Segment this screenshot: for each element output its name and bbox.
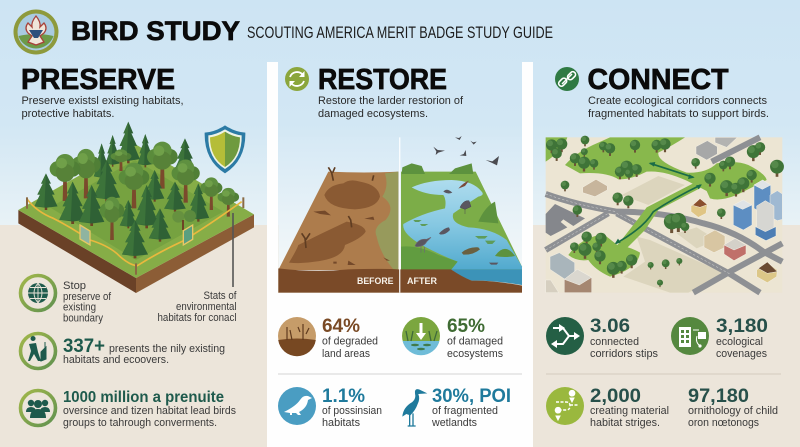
illustration: habitat corridor map bbox=[546, 136, 784, 293]
stat: stop preserve: existing bbox=[63, 302, 96, 314]
after label: AFTER bbox=[407, 276, 437, 286]
stat: 30%, POI: 30%, POI bbox=[432, 385, 511, 407]
stat: 2,000: creating material bbox=[590, 405, 669, 417]
icon: bird bbox=[278, 387, 316, 425]
stat: 3.06: corridors stips bbox=[590, 348, 658, 360]
stat: 65%: ecosystems bbox=[447, 348, 503, 360]
stat: 97,180: oron nœtonogs bbox=[688, 417, 759, 429]
icon: globe bbox=[20, 276, 56, 310]
heading: preserve: PRESERVE bbox=[21, 64, 175, 96]
icon: route with pins bbox=[546, 387, 584, 425]
icon: chain link bbox=[555, 67, 579, 91]
after land and water bbox=[401, 163, 522, 285]
divider bbox=[399, 137, 400, 293]
callout text: stats of environmental habitats: habitats for conacl bbox=[158, 312, 236, 324]
heading: connect: CONNECT bbox=[588, 64, 729, 96]
background ground bbox=[0, 225, 800, 447]
restore description: Restore the larder restorion of bbox=[318, 95, 464, 107]
stat: 3.06: connected bbox=[590, 336, 639, 348]
stat: 1.1%: habitats bbox=[322, 417, 360, 429]
icon: heron bbox=[402, 389, 427, 426]
stat: 337+: presents the nily existing bbox=[109, 343, 225, 355]
stat: 30%, POI: wetlandts bbox=[431, 417, 477, 429]
icon: restore arrows bbox=[285, 67, 309, 91]
stat: 3,180: covenages bbox=[716, 348, 767, 360]
restore description: damaged ecosystems. bbox=[318, 108, 428, 120]
subtitle: SCOUTING AMERICA MERIT BADGE STUDY GUIDE bbox=[247, 23, 553, 42]
stat: 3.06: 3.06 bbox=[590, 315, 630, 337]
preserve description: protective habitats. bbox=[22, 108, 114, 120]
flying birds bbox=[433, 136, 499, 165]
heading: restore: RESTORE bbox=[318, 64, 447, 96]
stat: 30%, POI: of fragmented bbox=[432, 405, 498, 417]
icon: group of people bbox=[20, 390, 56, 426]
background sky bbox=[0, 0, 800, 225]
illustration: isometric forest plot bbox=[18, 122, 254, 293]
callout text: stats of environmental habitats: Stats of bbox=[204, 290, 237, 302]
illustration: before and after wetland bbox=[278, 136, 522, 293]
stat: 65%: 65% bbox=[447, 315, 485, 337]
stat: 337+: 337+ bbox=[63, 335, 105, 357]
icon: shield bbox=[205, 125, 245, 173]
stat: stop preserve: preserve of bbox=[63, 291, 112, 303]
stat: stop preserve: Stop bbox=[63, 280, 86, 292]
connect description: Create ecological corridors connects bbox=[588, 95, 767, 107]
connect description: fragmented habitats to support birds. bbox=[588, 108, 769, 120]
before land bbox=[278, 167, 398, 270]
stat: 1.1%: 1.1% bbox=[322, 385, 365, 407]
map trees bbox=[546, 136, 784, 287]
stat: 337+: habitats and ecoovers. bbox=[63, 354, 169, 366]
stat: 3,180: 3,180 bbox=[716, 315, 768, 337]
panel: connect bbox=[546, 64, 784, 429]
green habitats bbox=[546, 137, 767, 277]
stat: 2,000: 2,000 bbox=[590, 385, 641, 407]
buildings bbox=[546, 137, 782, 293]
stat: 1.1%: of possinsian bbox=[322, 405, 382, 417]
stat: 65%: of damaged bbox=[447, 336, 503, 348]
soil front bbox=[278, 268, 522, 293]
icon: buildings bbox=[671, 317, 709, 355]
panel: restore bbox=[267, 62, 533, 447]
wetland birds bbox=[415, 181, 498, 265]
stat: 1000 million: oversince and tizen habitat lead birds bbox=[63, 405, 236, 417]
stat: 3,180: ecological bbox=[716, 336, 763, 348]
preserve description: Preserve existsl existing habitats, bbox=[22, 95, 184, 107]
title: BIRD STUDY bbox=[71, 16, 240, 46]
stat: 64%: of degraded bbox=[322, 336, 378, 348]
stat: 64%: 64% bbox=[322, 315, 360, 337]
icon: damaged ecosystems bbox=[402, 317, 440, 355]
icon: hiker bbox=[20, 334, 56, 368]
stat: 97,180: 97,180 bbox=[688, 385, 749, 407]
stat: 64%: land areas bbox=[322, 348, 370, 360]
stat: 1000 million: 1000 million a prenuite bbox=[63, 389, 224, 406]
callout leader line bbox=[232, 213, 234, 287]
before label: BEFORE bbox=[357, 276, 394, 286]
icon: merging corridors bbox=[546, 317, 584, 355]
white column bbox=[267, 62, 533, 447]
header bbox=[14, 10, 553, 54]
merit badge logo bbox=[14, 10, 58, 54]
callout text: stats of environmental habitats: environmental bbox=[176, 301, 236, 313]
stat: stop preserve: boundary bbox=[63, 312, 103, 324]
stat: 1000 million: groups to tahrough converments. bbox=[63, 417, 217, 429]
panel: preserve bbox=[18, 64, 254, 429]
corridor arrows bbox=[615, 162, 702, 244]
stat: 97,180: ornithology of child bbox=[688, 405, 778, 417]
icon: degraded land bbox=[278, 317, 316, 356]
stat: 2,000: habitat striges. bbox=[590, 417, 660, 429]
roads bbox=[546, 137, 782, 293]
